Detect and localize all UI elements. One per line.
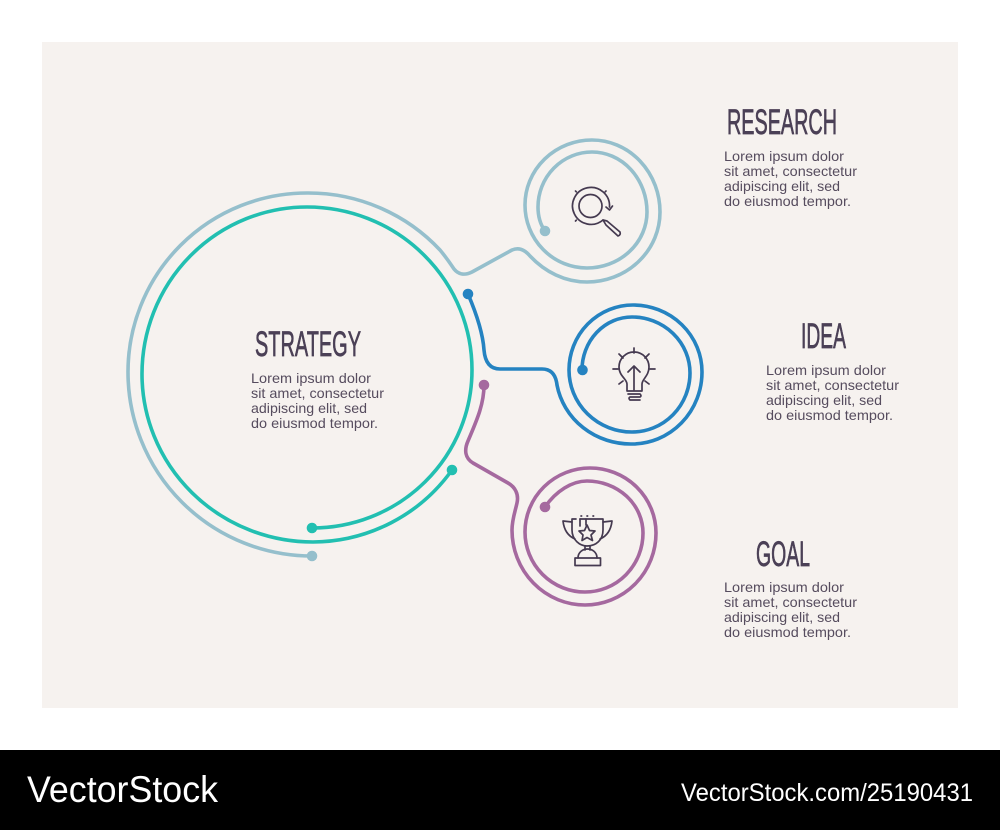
panel: background	[42, 42, 958, 708]
footer bar	[0, 750, 1000, 830]
footer: brand name: VectorStock	[27, 769, 218, 810]
text block: idea: Lorem ipsum dolor	[766, 363, 886, 378]
icon: trophy with star	[563, 516, 612, 566]
text block: goal: sit amet, consectetur	[724, 595, 857, 610]
main spiral: green inner circle	[142, 207, 472, 542]
icon: light bulb with up arrow	[613, 348, 655, 400]
heading: research: RESEARCH	[727, 103, 837, 142]
text block: goal: Lorem ipsum dolor	[724, 580, 844, 595]
connector and circle: goal	[466, 380, 656, 605]
text block: strategy: adipiscing elit, sed	[251, 401, 367, 416]
text block: idea: adipiscing elit, sed	[766, 393, 882, 408]
text block: idea: do eiusmod tempor.	[766, 408, 893, 423]
text block: research: adipiscing elit, sed	[724, 179, 840, 194]
text block: research: Lorem ipsum dolor	[724, 149, 844, 164]
main spiral: blue-grey outer line with research circle	[128, 140, 660, 561]
text block: idea: sit amet, consectetur	[766, 378, 899, 393]
text block: research: do eiusmod tempor.	[724, 194, 851, 209]
text block: goal: adipiscing elit, sed	[724, 610, 840, 625]
connector and circle: idea	[463, 289, 702, 444]
text block: goal	[724, 580, 857, 640]
heading: strategy: STRATEGY	[255, 325, 361, 364]
footer: image id: VectorStock.com/25190431	[681, 779, 973, 807]
heading: idea: IDEA	[801, 317, 846, 356]
text block: research: sit amet, consectetur	[724, 164, 857, 179]
text block: strategy	[251, 371, 384, 431]
text block: strategy: Lorem ipsum dolor	[251, 371, 371, 386]
heading: goal: GOAL	[756, 535, 810, 574]
text block: research	[724, 149, 857, 209]
text block: idea	[766, 363, 899, 423]
text block: goal: do eiusmod tempor.	[724, 625, 851, 640]
text block: strategy: do eiusmod tempor.	[251, 416, 378, 431]
icon: magnifying glass with arrow	[573, 187, 620, 236]
text block: strategy: sit amet, consectetur	[251, 386, 384, 401]
